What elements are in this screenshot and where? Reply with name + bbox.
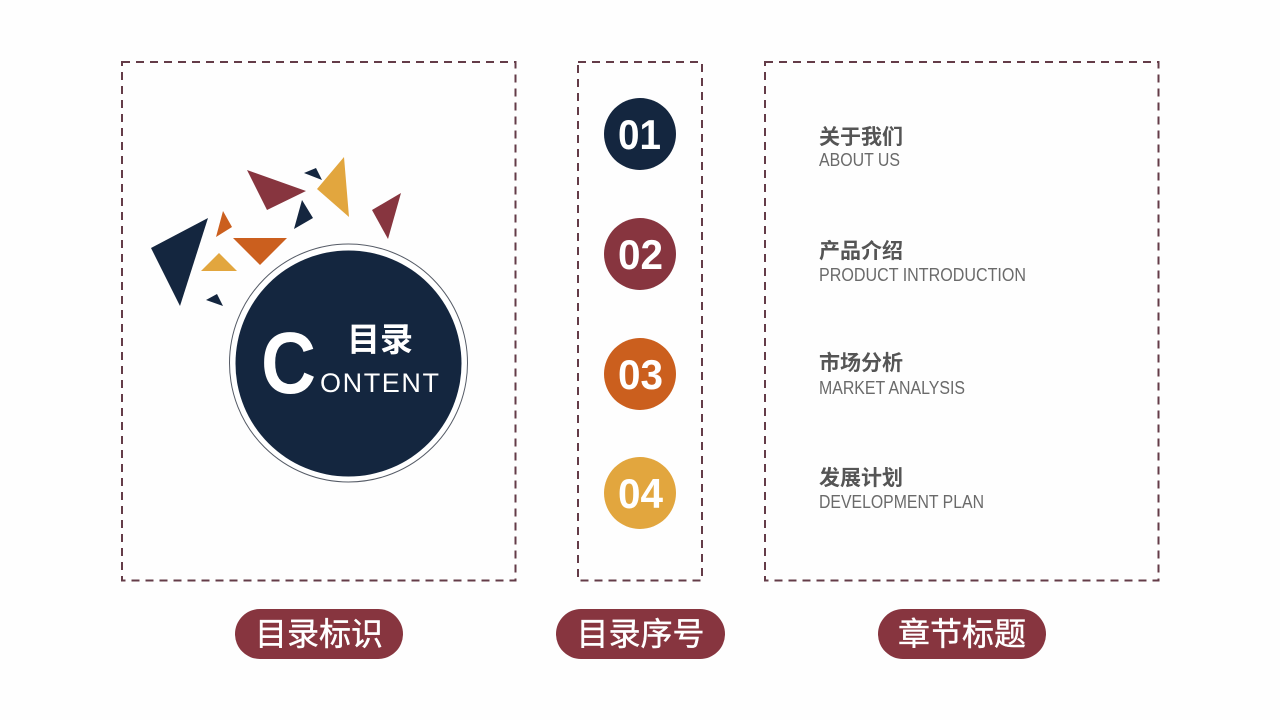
logo badge: content circle xyxy=(230,244,468,482)
chapter title: product introduction: PRODUCT INTRODUCTION xyxy=(819,265,1026,285)
chapter title: product introduction xyxy=(819,240,1026,285)
number badge 03 xyxy=(604,338,676,410)
chapter title: market analysis: MARKET ANALYSIS xyxy=(819,378,965,398)
chapter title: development plan: DEVELOPMENT PLAN xyxy=(819,492,984,512)
chapter title: development plan xyxy=(819,467,984,512)
number badge 01 xyxy=(604,98,676,170)
number badge 02 xyxy=(604,218,676,290)
label pill: chapter titles: 章节标题 xyxy=(898,616,1026,652)
logo word: ONTENT xyxy=(320,368,439,398)
chapter title: about us xyxy=(819,126,903,170)
label pill: sequence number: 目录序号 xyxy=(576,616,705,652)
number badge 04: 04 xyxy=(618,470,664,517)
chapter title: about us: ABOUT US xyxy=(819,150,900,170)
number badge 02: 02 xyxy=(618,231,663,278)
logo letter C: C xyxy=(261,315,316,412)
panel: number area dashed frame xyxy=(578,62,702,580)
panel: logo area dashed frame xyxy=(122,62,516,580)
chapter title: product introduction: 产品介绍 xyxy=(819,240,903,263)
panel: chapter titles dashed frame xyxy=(765,62,1158,580)
icon: scattered triangles xyxy=(151,157,401,306)
number badge 01: 01 xyxy=(618,111,661,158)
label pill: logo mark: 目录标识 xyxy=(255,616,383,652)
chapter title: market analysis: 市场分析 xyxy=(819,351,903,375)
number badge 03: 03 xyxy=(618,351,663,398)
label pill: logo mark xyxy=(235,609,403,659)
label pill: sequence number xyxy=(556,609,725,659)
label pill: chapter titles xyxy=(878,609,1046,659)
number badge 04 xyxy=(604,457,676,529)
logo heading: 目录 xyxy=(347,321,413,358)
chapter title: about us: 关于我们 xyxy=(819,126,903,149)
chapter title: market analysis xyxy=(819,351,965,398)
chapter title: development plan: 发展计划 xyxy=(819,467,903,490)
